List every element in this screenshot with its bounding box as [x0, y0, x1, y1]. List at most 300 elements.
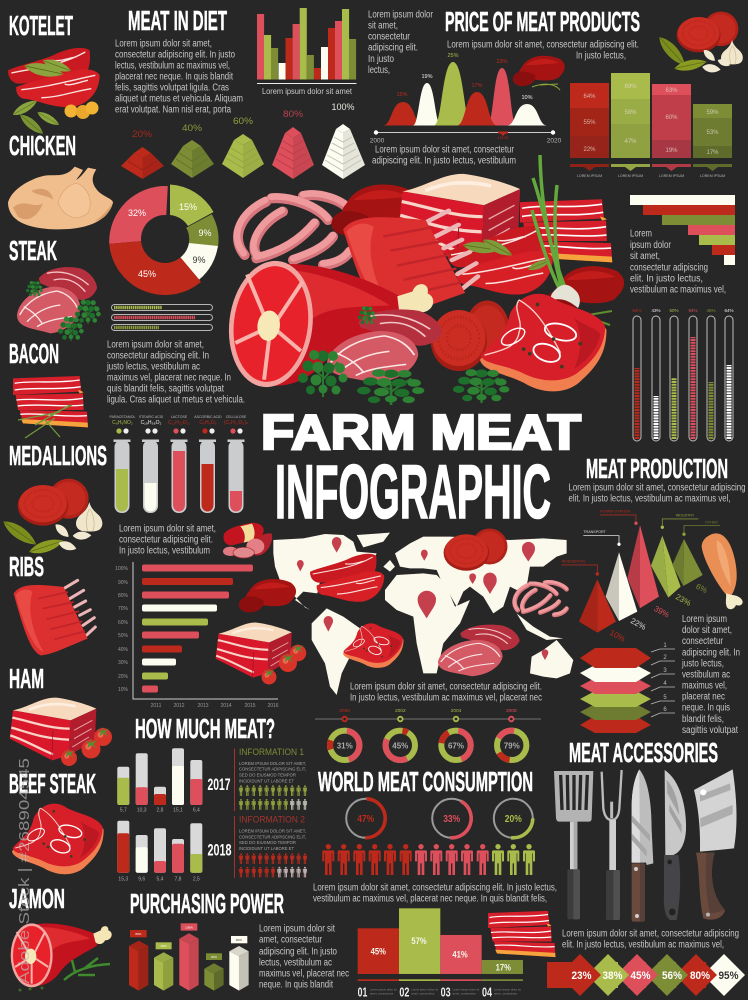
cylinder chart 2017: 6,4 — [193, 808, 200, 814]
information panel 1: CONSECTETUR ADIPISCING ELIT, — [239, 766, 306, 772]
information panel 2 — [234, 814, 307, 878]
stacked bar chart: 53% — [706, 130, 719, 136]
text block: above horizontal bars: Lorem ipsum dolor sit amet, — [119, 524, 216, 534]
bar 1: 80% — [135, 932, 142, 936]
bar 4: 20% — [211, 955, 217, 959]
power station pyramid: 39% — [652, 604, 671, 620]
bar 3: 100% — [185, 925, 193, 929]
text block: under wave chart: Lorem ipsum dolor sit amet, consectetur — [375, 144, 515, 156]
information panel 1: LOREM IPSUM DOLOR SIT AMET, — [239, 761, 306, 767]
text block: purchasing power — [259, 924, 349, 990]
3d pyramid chart — [562, 509, 743, 644]
heading: How much meat: HOW MUCH MEAT? — [135, 713, 275, 744]
vertical gauges — [632, 308, 734, 441]
pyramid 40%: 40% — [182, 123, 202, 133]
bar chart: top — [257, 8, 356, 96]
step bar chart: 02 — [399, 985, 409, 999]
wave chart: 15% — [396, 92, 408, 98]
text block: under donut: maximus vel, placerat nec neque. In — [107, 372, 231, 384]
timeline: 2004 — [451, 708, 462, 714]
vertical gauges: 45% — [706, 308, 716, 313]
text block: top middle: Lorem ipsum dolor — [368, 10, 434, 20]
infographic canvas: KOTELET — [9, 10, 73, 41]
icon: chicken leg — [702, 533, 743, 609]
information panel 1: INCIDIDUNT UT LABORE ET — [239, 778, 294, 784]
text block: world consumption: Lorem ipsum dolor sit amet, consectetur adipiscing elit. In justo lectus, — [313, 882, 557, 894]
icon: spatula — [554, 771, 593, 919]
icon: jamon — [11, 923, 112, 992]
stacked bar chart: 63% — [665, 88, 678, 94]
horizontal bar chart: 40% — [118, 647, 129, 653]
stacked bar chart: 59% — [706, 110, 719, 116]
text block: stepped bars: sit amet, — [630, 251, 660, 262]
ring 47% — [345, 797, 387, 839]
text block: meat in diet — [115, 38, 243, 116]
information panel 2: INCIDIDUNT UT LABORE ET — [239, 846, 294, 852]
step bar chart: 01 — [358, 985, 367, 999]
donut chart: 15% — [179, 202, 197, 212]
stacked bar chart — [570, 73, 732, 178]
cylinder chart 2017: 2,8 — [157, 808, 164, 814]
text block: right column — [681, 614, 740, 736]
north america — [273, 534, 377, 610]
chives and garlic — [532, 155, 580, 308]
horizontal bar chart: 100% — [115, 566, 129, 572]
industry pyramid: INDUSTRY — [676, 514, 695, 518]
cylinder chart 2018: 2,5 — [193, 876, 200, 882]
heading: Steak: STEAK — [9, 235, 57, 266]
pyramid 80% — [272, 109, 314, 179]
text block: meat in diet: consectetur adipiscing elit. In justo — [115, 50, 235, 60]
step bar chart: 03 — [441, 985, 451, 999]
tube labels: CELLULOSE — [226, 415, 247, 419]
timeline: 2002 — [395, 708, 406, 714]
residential pyramid: RESIDENTIAL — [562, 560, 586, 564]
greenland — [357, 533, 390, 547]
stacked bar chart: 17% — [706, 150, 719, 156]
step bar chart: 17% — [496, 962, 511, 972]
other pyramid: OTHER — [705, 520, 718, 524]
text block: under donut: quis blandit felis, sagittis volutpat — [107, 384, 224, 394]
cylinder chart 2017: 5,7 — [120, 808, 127, 814]
south america — [312, 608, 360, 695]
text block: accessories — [562, 928, 739, 950]
wave chart — [370, 53, 562, 144]
wave chart: 2000 — [370, 138, 385, 144]
text block: map: Lorem ipsum dolor sit amet, consectetur adipiscing elit. — [350, 682, 542, 692]
text block: right column: maximus vel, — [682, 680, 727, 692]
stacked bar chart: LOREM IPSUM — [700, 174, 725, 178]
industry pyramid — [651, 514, 698, 608]
step bar chart: amet, consectetur — [370, 991, 393, 995]
pyramid 80%: 80% — [283, 109, 303, 119]
pyramid 20%: 20% — [132, 129, 152, 139]
text block: meat in diet: Lorem ipsum dolor sit amet, — [115, 38, 212, 50]
map pins — [297, 537, 548, 660]
text block: right column: Lorem ipsum — [682, 614, 727, 625]
stacked bar chart: LOREM IPSUM — [618, 174, 643, 178]
text block: purchasing power: neque. In quis blandit — [259, 980, 333, 990]
cylinder chart 2017: 15,1 — [173, 808, 183, 814]
icon: chef knife — [632, 769, 653, 922]
wave chart: 123.00 — [498, 136, 508, 140]
pyramid 100% — [322, 102, 365, 179]
text block: price — [447, 40, 639, 62]
timeline — [315, 708, 541, 721]
column 3 — [652, 84, 691, 171]
horizontal bar chart: 2011 — [151, 703, 162, 709]
stacked bar chart: LOREM IPSUM — [659, 174, 684, 178]
diamond percentage ribbon: 38% — [602, 970, 623, 982]
heading: Chicken: CHICKEN — [9, 130, 76, 161]
cylinder chart 2017 — [117, 748, 202, 814]
ring 47%: 47% — [357, 814, 374, 825]
heading: Purchasing power: PURCHASING POWER — [130, 888, 284, 919]
tube 4 — [199, 440, 216, 513]
progress bars — [112, 304, 212, 330]
hero meat illustration — [222, 155, 624, 406]
transport pyramid — [583, 530, 647, 632]
residential pyramid: 10% — [608, 628, 627, 644]
icon: ham — [10, 698, 112, 766]
stacked hexagon layers: 2 — [663, 655, 667, 661]
power station pyramid: POWER STATION — [600, 509, 630, 513]
step bar chart: Lorem ipsum dolor sit — [370, 988, 397, 992]
test tubes — [110, 415, 248, 513]
text block: top middle: consectetur — [368, 32, 411, 42]
text block: purchasing power: amet, consectetur — [259, 934, 323, 946]
information panel 1 — [234, 747, 307, 811]
timeline: 2000 — [339, 708, 350, 714]
tube 2 — [142, 440, 159, 513]
icon: cleaver — [694, 769, 737, 920]
text block: top middle: adipiscing elit. — [368, 42, 418, 54]
stacked hexagon layers: 6 — [663, 707, 667, 713]
horizontal bar chart: 2013 — [197, 703, 209, 709]
icon: medallions top right — [655, 11, 743, 73]
tube labels: STEARIC ACID — [139, 415, 164, 419]
tube 1 — [114, 440, 130, 513]
step bar chart: amet, consectetur — [411, 991, 435, 995]
tube labels: C₁₂H₂₂O₁₁ — [168, 420, 190, 426]
pyramid 60% — [222, 116, 264, 178]
diamond percentage ribbon: 80% — [690, 970, 710, 982]
text block: right column: vestibulum ac — [682, 670, 730, 680]
world map — [273, 533, 573, 695]
icon: carving fork — [602, 770, 622, 920]
donut 45%: 45% — [392, 742, 408, 750]
column 4 — [693, 104, 732, 171]
tube labels: PARACETAMOL — [110, 415, 136, 419]
text block: under donut — [106, 340, 245, 406]
tube labels: (C₆H₁₀O₅)ₙ — [224, 420, 248, 426]
cylinder chart 2017: 10,3 — [137, 808, 147, 814]
horizontal bar chart: 60% — [118, 620, 129, 626]
step bar chart: 04 — [482, 985, 492, 999]
pyramid chart: 20 to 100 percent — [121, 102, 365, 179]
power station pyramid — [600, 509, 671, 620]
step bar chart: Lorem ipsum dolor sit — [411, 988, 438, 992]
tube 3 — [170, 440, 188, 513]
text block: stepped bars: consectetur adipiscing — [630, 262, 708, 274]
vertical gauges: 50% — [669, 308, 679, 313]
other pyramid: 6% — [694, 582, 709, 595]
africa — [385, 573, 470, 673]
text block: right column: blandit felis, — [682, 714, 724, 725]
vertical gauges: 94% — [688, 308, 698, 313]
stacked hexagon layers: 1 — [663, 643, 667, 649]
heading: World meat consumption: WORLD MEAT CONSUMPTION — [318, 766, 533, 797]
tube 5 — [228, 440, 244, 513]
step bar chart: amet, consectetur — [453, 991, 476, 995]
tube labels — [110, 415, 248, 426]
text block: meat in diet: lectus, vestibulum ac maximus vel, — [115, 60, 230, 72]
bar 5: 60% — [236, 938, 242, 942]
bar chart: top: Lorem ipsum dolor sit amet — [262, 87, 353, 96]
text block: top middle: sit amet, — [368, 20, 398, 32]
stacked bar chart: 19% — [665, 148, 678, 154]
text block: right column: consectetur — [682, 636, 724, 647]
donut chart: 32% — [128, 208, 146, 218]
heading: Jamon: JAMON — [9, 883, 65, 914]
australia — [530, 640, 573, 678]
stacked bar chart: 47% — [624, 139, 637, 145]
text block: purchasing power: lectus, vestibulum ac — [259, 958, 332, 968]
tube labels: C₆H₈O₆ — [199, 420, 217, 426]
wave chart: 2020 — [547, 138, 562, 144]
ring 33% — [425, 792, 478, 845]
donut 79% — [492, 725, 532, 765]
other pyramid — [672, 520, 720, 595]
text block: meat in diet: erat volutpat. Nam nisl erat, porta — [115, 104, 231, 116]
text block: above horizontal bars: consectetur adipiscing elit. — [119, 534, 213, 546]
wave chart: 17% — [471, 83, 483, 89]
text block: map: In justo lectus, vestibulum ac maximus vel, placerat nec — [350, 692, 542, 704]
horizontal bar chart: 2015 — [244, 703, 256, 709]
text block: stepped bars — [630, 228, 726, 296]
kitchen tools — [554, 769, 737, 922]
wave chart: 19% — [421, 74, 433, 80]
icon: steak — [17, 267, 101, 341]
horizontal bar chart: 80% — [118, 593, 129, 599]
stacked bar chart: 69% — [624, 84, 637, 90]
pyramid 20% — [121, 129, 164, 179]
diamond percentage ribbon: 56% — [662, 970, 682, 982]
text block: under donut: consectetur adipiscing elit. In — [107, 350, 209, 362]
diamond percentage ribbon: 45% — [630, 970, 651, 982]
donut chart — [109, 184, 219, 295]
infographic canvas: BEEF STEAK — [9, 768, 96, 799]
cylinder chart 2018: 15,3 — [118, 876, 128, 882]
transport pyramid: TRANSPORT — [583, 530, 607, 534]
step bar chart — [358, 908, 523, 999]
pyramid 60%: 60% — [233, 116, 253, 126]
stacked bar chart: LOREM IPSUM — [577, 174, 602, 178]
step bar chart: Lorem ipsum dolor sit — [453, 988, 480, 992]
step bar chart: Lorem ipsum dolor sit — [494, 988, 521, 992]
icon: dark meat — [513, 56, 565, 90]
pyramid 100%: 100% — [332, 102, 354, 112]
ring gauges — [345, 792, 533, 845]
donut 67%: 67% — [448, 742, 464, 750]
wave chart: 25% — [447, 53, 459, 59]
horizontal bar chart: 70% — [118, 606, 129, 612]
information panel 1: SED DO EIUSMOD TEMPOR — [239, 772, 296, 778]
title: Farm Meat: FARM MEAT — [261, 406, 581, 460]
ring 20% — [493, 798, 533, 838]
text block: under wave chart — [372, 144, 516, 166]
donut 45% — [381, 726, 420, 765]
step bar chart: 41% — [452, 949, 468, 959]
heading: Ribs: RIBS — [9, 551, 44, 582]
wave chart: 10% — [521, 95, 533, 101]
column 2 — [611, 73, 650, 171]
text block: right column: placerat nec — [682, 692, 725, 702]
text block: world consumption: vestibulum ac maximus vel, placerat nec neque. In quis blandit felis, — [313, 894, 547, 904]
text block: under donut: Lorem ipsum dolor sit amet, — [107, 340, 204, 350]
cylinder chart 2018: 5,4 — [157, 876, 164, 882]
isometric bar chart — [129, 923, 249, 991]
step bar chart: 45% — [371, 946, 386, 956]
text block: production — [568, 482, 746, 504]
text block: stepped bars: elit. In justo lectus, — [630, 274, 703, 284]
tube labels: LACTOSE — [171, 415, 188, 419]
heading: Medallions: MEDALLIONS — [9, 440, 107, 471]
tube labels: C₈H₉NO₂ — [112, 420, 133, 426]
horizontal bar chart: 50% — [118, 633, 129, 639]
text block: right column: justo lectus, — [681, 658, 724, 670]
cylinder chart 2018: 9,6 — [138, 876, 145, 882]
text block: meat in diet: placerat nec neque. In quis blandit — [115, 72, 233, 82]
pyramid 40% — [171, 123, 214, 178]
pill icons — [116, 428, 243, 434]
vertical gauges: 64% — [724, 308, 734, 313]
ring 20%: 20% — [505, 814, 522, 825]
stacked bar chart: 64% — [583, 94, 596, 100]
donut chart: 9% — [198, 228, 212, 238]
column 1 — [570, 83, 609, 171]
donut 79%: 79% — [504, 742, 520, 750]
text block: under donut: justo lectus, vestibulum ac — [106, 362, 200, 372]
watermark: stock id: Adobe Stock | #268904545 — [16, 758, 33, 984]
stacked bar chart: 55% — [583, 120, 596, 126]
map meat icons — [216, 523, 567, 684]
text block: right column: dolor sit amet, — [682, 625, 732, 636]
text block: purchasing power: maximus vel, placerat nec — [259, 968, 349, 980]
text block: above horizontal bars: In justo lectus, vestibulum — [119, 546, 210, 556]
icon: ribs — [14, 580, 95, 655]
stacked hexagon layers: 3 — [663, 668, 667, 674]
vertical gauges: 43% — [651, 308, 661, 313]
information panel 2: INFORMATION 2 — [239, 814, 305, 824]
donut row — [327, 725, 532, 765]
donut chart: 9% — [192, 255, 206, 265]
tube labels: C₁₈H₃₆O₂ — [141, 420, 161, 426]
icon: bacon — [13, 376, 88, 438]
donut 31%: 31% — [337, 742, 353, 750]
step bar chart: 57% — [411, 936, 427, 946]
industry pyramid: 23% — [674, 592, 692, 608]
horizontal bar chart: 20% — [118, 674, 129, 680]
horizontal bar chart: 2016 — [267, 703, 279, 709]
stacked hexagon layers — [580, 643, 675, 733]
infographic canvas: BACON — [9, 338, 59, 369]
icon: boning knife — [664, 770, 686, 920]
text block: meat in diet: felis, sagittis volutpat ligula. Cras — [115, 82, 229, 94]
cylinder chart 2018 — [117, 821, 202, 882]
wave chart: 23% — [496, 59, 508, 65]
horizontal bar chart: 90% — [118, 580, 129, 586]
text block: map — [350, 682, 542, 704]
transport pyramid: 22% — [629, 616, 647, 632]
text block: price: In justo lectus, — [576, 50, 626, 62]
text block: meat in diet: aliquet ut metus et vehicula. Aliquam — [115, 94, 243, 104]
donut chart: 45% — [138, 269, 156, 279]
text block: top middle: lectus, — [368, 65, 390, 76]
horizontal bar chart: 2012 — [173, 703, 185, 709]
information panel 2: LOREM IPSUM DOLOR SIT AMET, — [239, 828, 306, 834]
diamond percentage ribbon: 23% — [572, 970, 592, 982]
stacked bar chart: 22% — [583, 147, 596, 153]
islands — [517, 613, 563, 640]
horizontal bar chart: 30% — [118, 660, 129, 666]
stacked hexagon layers: 4 — [663, 681, 667, 687]
text block: right column: neque. In quis — [682, 702, 730, 714]
stacked hexagon layers: 5 — [663, 695, 667, 701]
diamond percentage ribbon: 95% — [718, 970, 739, 982]
text block: under wave chart: adipiscing elit. In justo lectus, vestibulum — [372, 156, 516, 166]
stepped bars — [630, 195, 735, 265]
year label 2018: 2018 — [208, 840, 232, 860]
eurasia — [395, 537, 567, 613]
text block: above horizontal bars — [119, 524, 216, 556]
text block: world consumption — [313, 882, 557, 904]
text block: top middle — [368, 10, 434, 76]
bar 2: 45% — [161, 944, 167, 948]
heading: Ham: HAM — [9, 663, 44, 694]
cylinder chart 2018: 7,8 — [175, 876, 182, 882]
heading: Meat in diet: MEAT IN DIET — [128, 5, 227, 36]
horizontal bar chart: 2014 — [220, 703, 232, 709]
text block: under donut: ligula. Cras aliquet ut metus et vehicula. — [107, 394, 245, 406]
people pictogram row — [322, 844, 535, 875]
icon: chicken — [8, 167, 113, 229]
text block: purchasing power: Lorem ipsum dolor sit — [259, 924, 335, 934]
year label 2017: 2017 — [208, 775, 230, 794]
information panel 1: INFORMATION 1 — [239, 747, 304, 757]
text block: stepped bars: Lorem — [630, 228, 652, 240]
residential pyramid — [562, 560, 627, 644]
timeline: 2008 — [506, 708, 517, 714]
information panel 2: CONSECTETUR ADIPISCING ELIT, — [239, 834, 306, 840]
horizontal bar chart — [115, 562, 279, 709]
diamond percentage ribbon — [547, 954, 745, 996]
icon: kotelet — [8, 48, 100, 137]
stacked bar chart: 58% — [624, 110, 637, 116]
step bar chart: amet, consectetur — [494, 991, 517, 995]
text block: stepped bars: ipsum dolor — [630, 240, 672, 251]
icon: beef steak — [12, 804, 104, 874]
stacked bar chart: 60% — [665, 115, 678, 121]
icon: medallions — [0, 479, 102, 557]
vertical gauges: 54% — [632, 308, 642, 313]
information panel 2: SED DO EIUSMOD TEMPOR — [239, 840, 296, 846]
text block: purchasing power: adipiscing elit. In justo — [259, 946, 337, 958]
text block: top middle: In justo — [368, 54, 394, 65]
tube labels: ASCORBIC ACID — [194, 415, 222, 419]
ring 33%: 33% — [443, 814, 460, 825]
horizontal bar chart: 10% — [118, 687, 129, 693]
